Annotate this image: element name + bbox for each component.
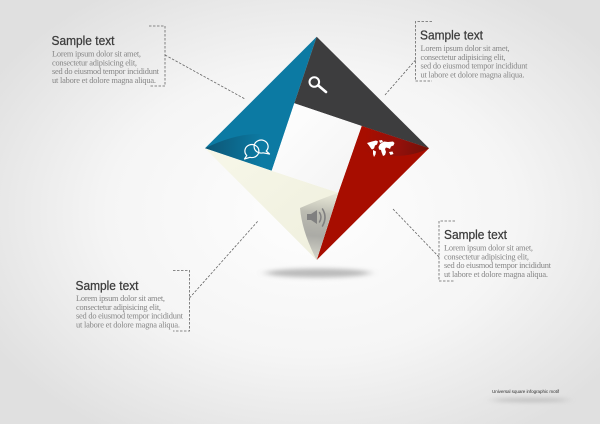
callout: bottom left [76,221,258,331]
caption shadow [492,398,568,402]
icon: world map [367,140,394,157]
text block: Lorem ipsum dolor sit amet, [52,50,141,58]
square infographic diamond [205,37,429,260]
panel: cream segment [205,148,338,260]
heading: Sample text [76,279,139,293]
text block: consectetur adipisicing elit, [76,303,161,312]
panel: dark grey segment [294,37,429,148]
icon: speech bubbles [244,140,270,159]
connector [173,221,258,331]
text block: Lorem ipsum dolor sit amet, [76,294,165,303]
text block: Lorem ipsum dolor sit amet, [444,244,533,252]
text block: sed do eiusmod tempor incididunt [76,312,184,320]
connector [149,26,245,99]
text block: ut labore et dolore magna aliqua. [52,76,156,85]
text block: ut labore et dolore magna aliqua. [76,320,180,330]
heading: Sample text [52,34,115,48]
icon: magnifier [310,77,326,92]
callout: top left [52,26,245,99]
text block: consectetur adipisicing elit, [420,53,506,62]
panel: red segment [317,126,429,260]
text block: ut labore et dolore magna aliqua. [444,270,548,279]
text block: consectetur adipisicing elit, [444,252,529,262]
diamond shadow [266,268,370,278]
icon: speaker [307,209,325,226]
text block: sed do eiusmod tempor incididunt [420,62,528,70]
text block: sed do eiusmod tempor incididunt [52,67,160,76]
connector [385,22,432,95]
text block: consectetur adipisicing elit, [52,58,137,68]
connector [393,209,455,281]
panel: blue segment [205,37,317,171]
heading: Sample text [444,228,507,242]
text block: Lorem ipsum dolor sit amet, [420,44,510,53]
heading: Sample text [420,28,483,42]
caption: Universal square infographic motif [492,389,560,394]
text block: sed do eiusmod tempor incididunt [444,261,552,270]
text block: ut labore et dolore magna aliqua. [420,70,524,80]
callout: right [393,209,552,281]
callout: top right [385,22,528,95]
panel: white centre square [272,103,362,193]
